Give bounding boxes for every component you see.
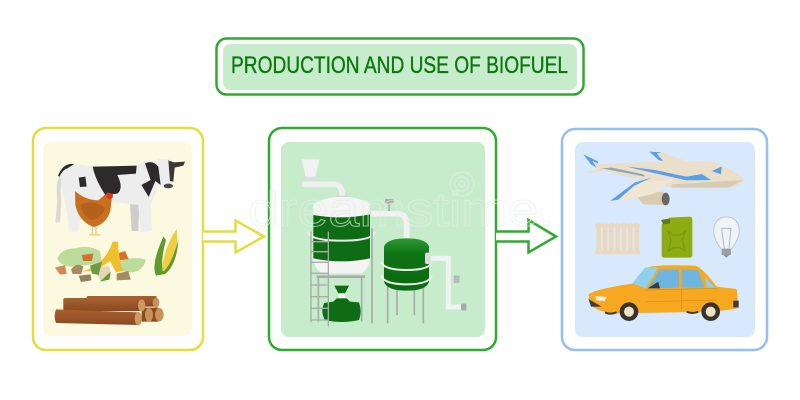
icon: car <box>588 265 739 321</box>
icon: light bulb <box>714 217 739 258</box>
watermark: dreamstime. <box>248 184 554 237</box>
icon: main reactor tank <box>308 197 375 323</box>
title text: PRODUCTION AND USE OF BIOFUEL <box>231 52 568 79</box>
icon: jerry can <box>661 217 692 258</box>
icon: corn <box>154 229 178 276</box>
icon: hopper and inlet pipe <box>302 159 348 200</box>
icon: radiator <box>595 223 640 254</box>
icon: hen <box>75 191 113 235</box>
panel: biofuel plant <box>269 128 496 350</box>
icon: airplane <box>583 152 744 205</box>
icon: secondary tank <box>381 238 432 323</box>
icon: ladder <box>311 232 328 327</box>
icon: food scraps <box>55 242 146 282</box>
icon: logs <box>55 296 164 325</box>
panel: feedstocks <box>33 128 203 350</box>
icon: cow <box>55 159 185 235</box>
arrow: plant to uses <box>496 220 556 252</box>
arrow: feedstocks to plant <box>203 220 264 252</box>
icon: outlet pipe <box>425 253 466 310</box>
icon: connecting pipe <box>371 199 407 240</box>
panel: uses of biofuel <box>562 129 767 350</box>
title box <box>216 38 584 94</box>
